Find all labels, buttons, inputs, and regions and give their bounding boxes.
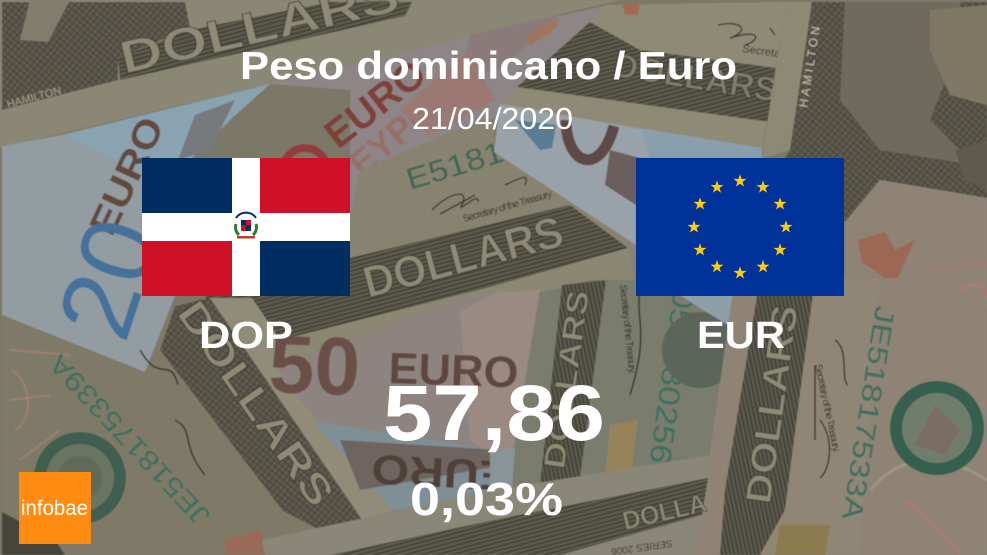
background: banknote collage: DOLLA [620, 487, 709, 536]
green dollar [510, 280, 735, 490]
blue euro corner [62, 84, 270, 175]
bottom dollar [262, 455, 712, 555]
background: banknote collage: 056180256 [643, 287, 700, 466]
blue-grey euro top right [494, 104, 762, 245]
blue euro strip [313, 421, 510, 511]
pink euro print: EURO [316, 51, 435, 157]
background: banknote collage: DOLLARS [611, 46, 780, 110]
flag: European Union [636, 158, 844, 296]
title: Peso dominicano / Euro [240, 45, 737, 88]
background: banknote collage: HAMILTON [796, 25, 823, 108]
logo: infobae: infobae [21, 497, 88, 520]
background: banknote collage: DOLLARS [737, 302, 806, 506]
background: banknote collage: 50 [267, 319, 362, 413]
right note with dollar band [695, 278, 987, 555]
right seal [896, 387, 978, 469]
background: banknote collage: Secretary [742, 43, 790, 62]
background: banknote collage: EURO [370, 446, 512, 500]
background: banknote collage: DOLLARS [358, 207, 569, 308]
date: 21/04/2020 [412, 101, 573, 136]
percentage change: 0,03% [410, 473, 563, 525]
background: banknote collage: HAMILTON [6, 85, 63, 111]
background: banknote collage: Secretary of the Treasury. [617, 284, 637, 375]
top centre dollar [500, 2, 786, 150]
currency code: EUR: EUR [697, 315, 785, 357]
background: banknote collage: Secretary of the Treasury [195, 366, 252, 448]
background: banknote collage: DOLLARS [169, 293, 342, 515]
top-left dollar [0, 0, 620, 148]
background: banknote collage: EURO [388, 344, 519, 398]
background: banknote collage: Secretary of the Treasury [462, 189, 553, 225]
icon: ring of twelve stars [688, 174, 792, 278]
diagonal dollar band [160, 298, 363, 535]
central dollar [205, 120, 636, 350]
background: banknote collage: 20 [36, 205, 183, 352]
icon: coat of arms [236, 213, 256, 238]
fifty euro note [275, 290, 510, 470]
background: banknote collage: JE51817533A [836, 304, 901, 523]
background: banknote collage: Secretary of the Treasury. [812, 363, 842, 454]
background: banknote collage: EURO [82, 111, 173, 242]
flag: Dominican Republic [142, 158, 350, 296]
currency code: DOP: DOP [199, 315, 293, 357]
bottom-left cream note [2, 298, 400, 555]
exchange rate: 57,86 [383, 368, 605, 457]
mauve euro top centre [270, 5, 610, 225]
background: banknote collage: EYPO [341, 88, 444, 184]
background: banknote collage: E5181 [402, 136, 508, 197]
dollar margin and Hamilton portrait [763, 2, 812, 158]
logo: infobae [19, 472, 91, 544]
background: banknote collage: DOLLARS [538, 288, 596, 471]
grey-blue euro left [2, 135, 175, 372]
right beige note [700, 180, 987, 555]
background: banknote collage: JE518175339A [43, 349, 216, 531]
